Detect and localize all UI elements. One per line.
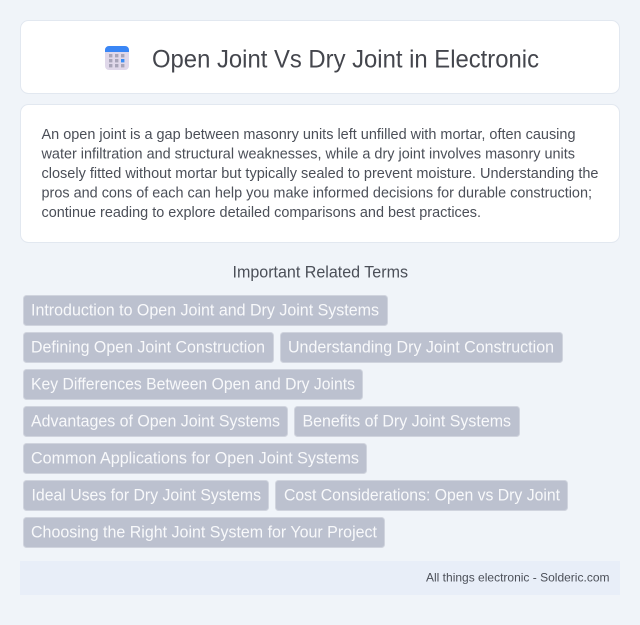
tag: Benefits of Dry Joint Systems bbox=[302, 413, 511, 431]
text block: introduction paragraph: closely fitted without mortar but typically sealed to prevent moisture. Understanding the bbox=[42, 166, 598, 182]
panel: introduction bbox=[20, 104, 620, 242]
tag: Understanding Dry Joint Construction bbox=[288, 339, 554, 357]
footer: All things electronic - Solderic.com bbox=[426, 571, 610, 585]
text block: introduction paragraph: An open joint is a gap between masonry units left unfilled with mortar, often causing bbox=[42, 127, 576, 143]
tag bbox=[24, 406, 288, 436]
tag bbox=[24, 370, 362, 400]
tag: Introduction to Open Joint and Dry Joint Systems bbox=[31, 302, 379, 320]
text block: introduction paragraph: water infiltration and structural weaknesses, while a dry joint involves masonry units bbox=[40, 146, 575, 162]
icon: calendar bbox=[105, 46, 129, 70]
tag: Choosing the Right Joint System for Your Project bbox=[31, 524, 377, 542]
tag bbox=[24, 332, 274, 362]
tag bbox=[24, 518, 384, 548]
tag: Common Applications for Open Joint Systems bbox=[31, 450, 359, 468]
footer bbox=[20, 561, 620, 595]
tag bbox=[294, 406, 520, 436]
text block: introduction paragraph bbox=[40, 127, 598, 221]
tag bbox=[24, 444, 366, 474]
panel: related term tags bbox=[24, 296, 568, 548]
tag bbox=[24, 296, 388, 326]
tag: Ideal Uses for Dry Joint Systems bbox=[32, 487, 261, 505]
title: Open Joint Vs Dry Joint in Electronic bbox=[152, 46, 539, 74]
tag bbox=[280, 332, 562, 362]
text block: introduction paragraph: pros and cons of each can help you make informed decisions for durable construction; bbox=[42, 186, 592, 202]
text block: introduction paragraph: continue reading to explore detailed comparisons and best practices. bbox=[42, 205, 481, 221]
tag: Defining Open Joint Construction bbox=[31, 339, 265, 357]
tag bbox=[276, 480, 568, 510]
tag: Advantages of Open Joint Systems bbox=[31, 413, 280, 431]
tag bbox=[24, 480, 268, 510]
tag: Cost Considerations: Open vs Dry Joint bbox=[284, 487, 560, 505]
tag: Key Differences Between Open and Dry Joints bbox=[31, 376, 355, 394]
heading: related terms: Important Related Terms bbox=[232, 264, 408, 282]
panel: title card bbox=[20, 20, 620, 94]
